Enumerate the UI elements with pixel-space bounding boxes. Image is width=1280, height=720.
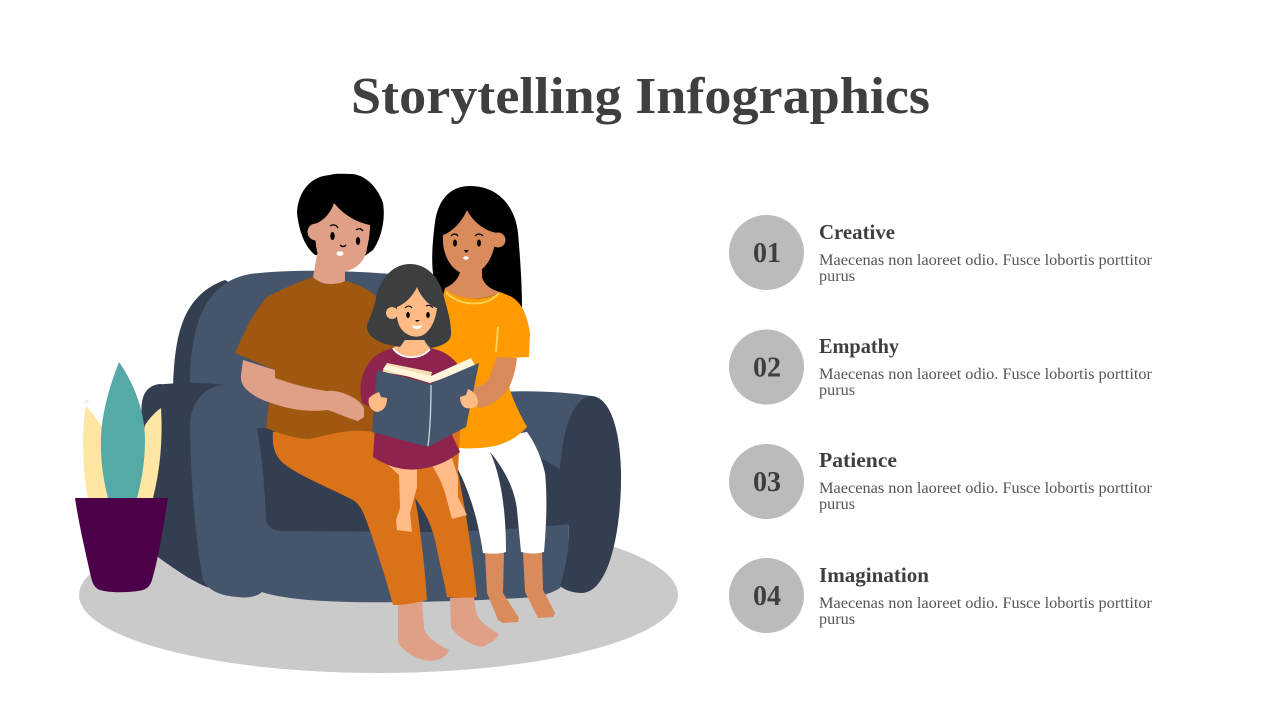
- list item 04: purus: [819, 611, 855, 628]
- sofa: [141, 271, 621, 602]
- woman's face details: [451, 234, 483, 260]
- man: [235, 174, 499, 661]
- open book: [372, 358, 479, 447]
- list item 03: 03: [753, 467, 781, 498]
- list item 01: 01: [753, 238, 781, 269]
- floor shadow: [79, 517, 678, 673]
- title: Storytelling Infographics: [351, 68, 930, 125]
- list item 02: Maecenas non laoreet odio. Fusce lobortis porttitor: [819, 366, 1153, 383]
- list item 04: Maecenas non laoreet odio. Fusce lobortis porttitor: [819, 595, 1153, 612]
- list item 01: [729, 215, 1153, 290]
- list item 03: purus: [819, 496, 855, 513]
- girl: [360, 264, 479, 532]
- list item 04: 04: [753, 581, 781, 612]
- list item 02: 02: [753, 352, 781, 384]
- list item 03: [729, 444, 1153, 519]
- man's face details: [330, 225, 363, 256]
- illustration: family reading on a sofa: [75, 174, 678, 673]
- list item 04: [729, 558, 1153, 633]
- list item 01: Creative: [819, 220, 895, 244]
- list item 01: Maecenas non laoreet odio. Fusce lobortis porttitor: [819, 252, 1153, 269]
- girl's hands: [368, 389, 478, 412]
- list item 02: purus: [819, 382, 855, 399]
- woman: [430, 186, 555, 623]
- list item 03: Maecenas non laoreet odio. Fusce lobortis porttitor: [819, 480, 1153, 497]
- plant: [75, 362, 168, 592]
- girl's face details: [405, 305, 433, 329]
- list item 02: Empathy: [819, 334, 899, 358]
- list item 02: [729, 330, 1153, 404]
- list item 03: Patience: [819, 448, 897, 472]
- list item 04: Imagination: [819, 563, 929, 587]
- list item 01: purus: [819, 268, 855, 285]
